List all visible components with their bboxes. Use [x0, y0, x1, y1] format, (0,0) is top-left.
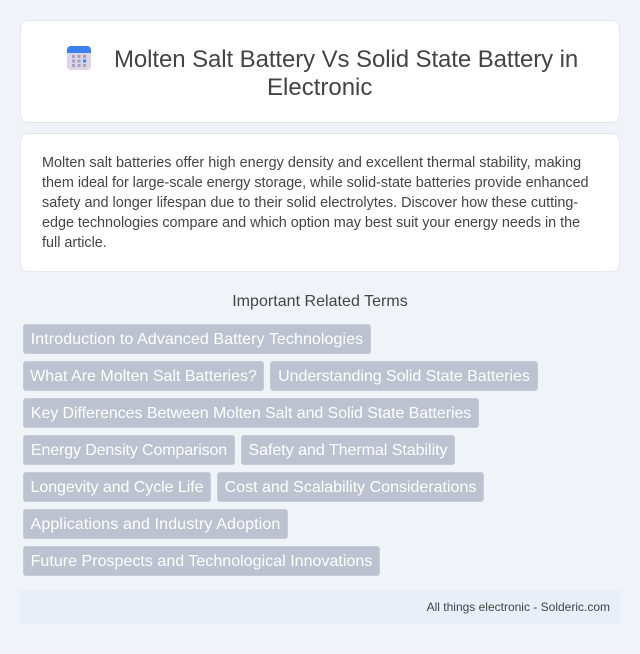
title line 2: Electronic: [267, 74, 372, 101]
tag: Safety and Thermal Stability: [249, 442, 447, 459]
tag: [23, 472, 211, 502]
panel: title card: [20, 20, 620, 123]
tag: [23, 546, 380, 576]
icon: calendar grid: [67, 46, 91, 70]
tag: [23, 324, 371, 354]
tag: Energy Density Comparison: [31, 442, 227, 459]
intro text: full article.: [42, 235, 107, 251]
tag: [23, 435, 235, 465]
heading: related terms: Important Related Terms: [232, 293, 408, 310]
tag: Introduction to Advanced Battery Technologies: [31, 331, 363, 348]
tag: [270, 361, 538, 391]
tag: Future Prospects and Technological Innovations: [31, 553, 372, 570]
tag: Applications and Industry Adoption: [31, 516, 280, 533]
title line 1: Molten Salt Battery Vs Solid State Battery in: [114, 46, 578, 73]
intro text: safety and longer lifespan due to their solid electrolytes. Discover how these cutting-: [42, 195, 578, 211]
intro text: them ideal for large-scale energy storage, while solid-state batteries provide enhanced: [42, 175, 589, 191]
tag: [217, 472, 484, 502]
intro text: Molten salt batteries offer high energy density and excellent thermal stability, making: [42, 155, 581, 171]
tag: Understanding Solid State Batteries: [278, 368, 530, 385]
intro text: edge technologies compare and which option may best suit your energy needs in the: [42, 215, 580, 231]
tag: [23, 361, 264, 391]
tag: Longevity and Cycle Life: [31, 479, 203, 496]
panel: intro text card: [20, 133, 620, 272]
intro text: [42, 155, 589, 251]
tag: Cost and Scalability Considerations: [225, 479, 476, 496]
tag: [241, 435, 455, 465]
footer: [20, 590, 620, 624]
tag: [23, 398, 479, 428]
tag: What Are Molten Salt Batteries?: [30, 368, 257, 385]
footer credit: All things electronic - Solderic.com: [427, 600, 610, 614]
tag: Key Differences Between Molten Salt and Solid State Batteries: [31, 405, 471, 422]
tag: [23, 509, 288, 539]
